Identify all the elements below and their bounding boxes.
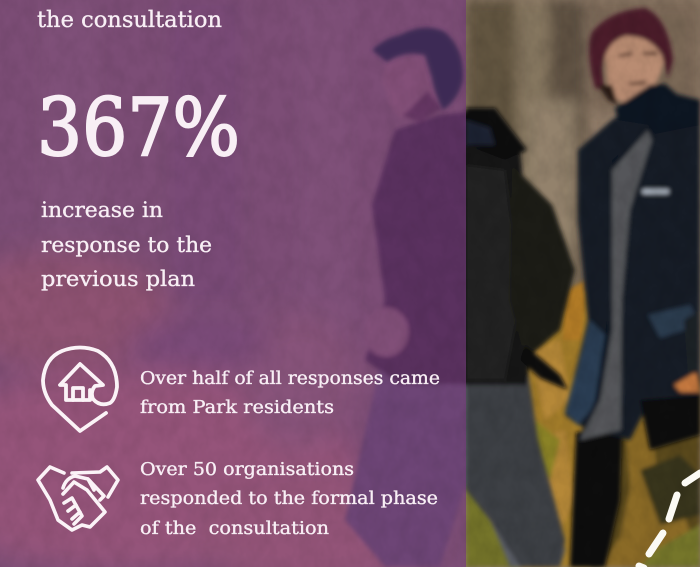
big number: 367%: 367%: [37, 81, 240, 174]
man on the left, under overlay: [345, 55, 575, 567]
icon: handshake: [38, 467, 118, 530]
panel: translucent purple overlay: [0, 0, 466, 567]
text block: park residents: from Park residents: [140, 398, 334, 418]
grey inner lining: [580, 130, 652, 440]
man's hand: [364, 308, 408, 356]
woman's coat: [565, 84, 700, 440]
text block: increase in response: previous plan: [41, 267, 195, 292]
panel texture: [0, 0, 466, 567]
coat pocket and logo: [648, 305, 700, 338]
woman's neck and face: [603, 31, 664, 102]
woman's hat: [589, 8, 673, 90]
photo grain on the right: [466, 0, 700, 567]
woman on the right: [565, 8, 700, 567]
text block: park residents: [140, 369, 440, 418]
text block: organisations: of the consultation: [140, 519, 329, 539]
text block: increase in response: increase in: [41, 198, 163, 223]
text block: organisations: Over 50 organisations: [140, 460, 354, 480]
woman's black leggings: [570, 432, 622, 567]
text block: increase in response: [41, 198, 212, 292]
dashed trail line: [639, 473, 700, 567]
heading: the consultation: the consultation: [37, 8, 222, 33]
man's jeans: [344, 371, 567, 567]
text block: increase in response: response to the: [41, 233, 212, 258]
man's cap seen through the overlay: [372, 28, 463, 110]
backpack: [510, 165, 575, 360]
man's jacket: [365, 112, 530, 385]
ferns, right side: [466, 280, 700, 567]
text block: park residents: Over half of all responses came: [140, 369, 440, 389]
icon: house in map pin: [43, 348, 117, 431]
text block: organisations: [140, 460, 438, 539]
text block: organisations: responded to the formal phase: [140, 489, 438, 509]
man's head: [404, 92, 430, 112]
woman's hand: [674, 372, 700, 392]
